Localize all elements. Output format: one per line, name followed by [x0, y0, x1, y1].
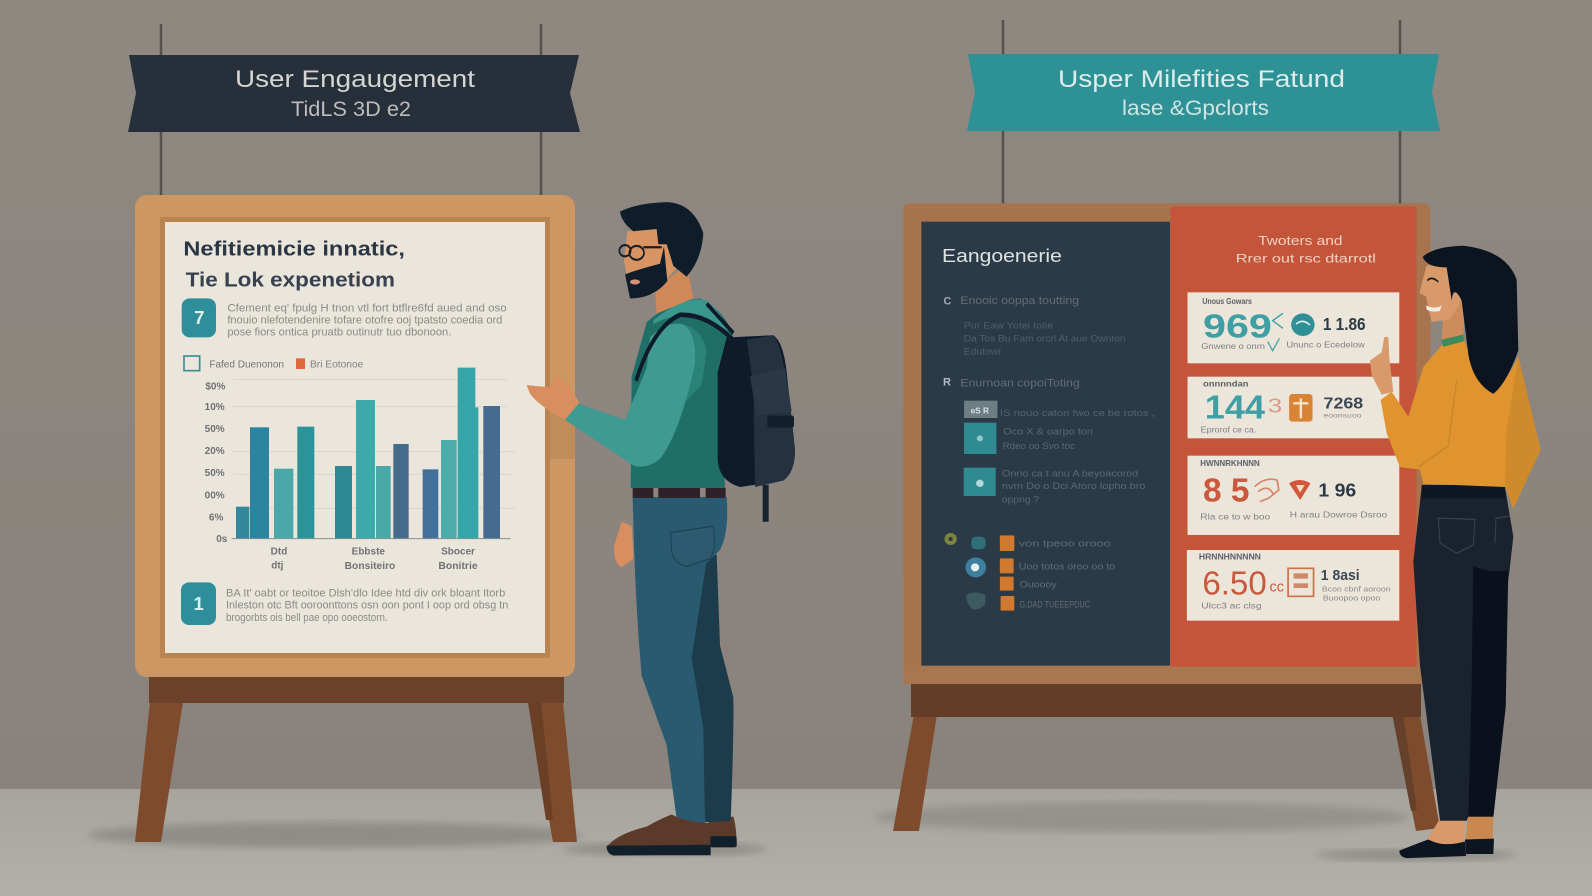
- back leg: [690, 554, 733, 822]
- heading: [183, 237, 405, 292]
- stat card 2: onnnndan: [1203, 380, 1249, 389]
- item tile teal: [964, 423, 996, 454]
- stat card 2: Eprorof ce ca.: [1201, 425, 1256, 434]
- paper sheet: [165, 222, 545, 653]
- stat card 3: Rla ce to w boo: [1200, 511, 1271, 521]
- banner title: User Engaugement: [235, 66, 475, 93]
- stat card 1: 969: [1203, 308, 1272, 346]
- stat card 4: 1 8asi: [1321, 568, 1360, 584]
- stat card 1: Gnwene o onrn: [1201, 341, 1265, 351]
- section one: [943, 295, 1126, 358]
- stat card 4: Bcon cbnf aoroon: [1322, 584, 1391, 593]
- pants: [1413, 487, 1513, 821]
- stat card 1: Ununc o Ecedelow: [1286, 340, 1366, 350]
- text block: note: [226, 588, 508, 624]
- stat card 2: eoonsuoo: [1324, 412, 1362, 419]
- bar chart: Ebbste: [352, 547, 385, 558]
- hair: [620, 202, 703, 277]
- text block: note: Inleston otc Bft ooroonttons osn oon pont I oop ord obsg tn: [226, 600, 508, 612]
- stat card 4: HRNNHNNNNN: [1199, 552, 1261, 561]
- stat card 2: 7268: [1324, 396, 1364, 412]
- bar chart: Dtd: [271, 547, 287, 558]
- stat card 3: HWNNRKHNNN: [1200, 459, 1260, 468]
- banner subtitle: TidLS 3D e2: [291, 98, 411, 121]
- text block: note: BA It' oabt or teoitoe Dlsh'dlo Idee htd div ork bloant Itorb: [226, 588, 505, 600]
- heading: Nefitiemicie innatic,: [183, 237, 405, 260]
- section two: IS nouo caton fwo ce be rotos ,: [1000, 408, 1155, 418]
- item tile teal lower: [964, 468, 996, 496]
- stat card 3: H arau Dowroe Dsroo: [1290, 510, 1388, 520]
- stat card 4: 6.50: [1202, 565, 1267, 602]
- banner: right heading: [967, 54, 1440, 131]
- stat card 2: 144: [1205, 389, 1265, 426]
- panel: left board: [135, 195, 575, 677]
- sweater: [1381, 339, 1540, 508]
- stat card 1: Unous Gowars: [1202, 297, 1252, 306]
- hand: [527, 374, 579, 420]
- pockets: [1438, 516, 1510, 553]
- lower hand: [614, 522, 633, 567]
- icon list: [944, 533, 1115, 611]
- easel: right stand: [893, 683, 1440, 831]
- section two: R: [943, 377, 951, 389]
- bar chart: Sbocer: [441, 547, 475, 558]
- stat card 4: cc: [1269, 580, 1284, 596]
- stat card 3: 8 5: [1203, 472, 1250, 510]
- bar chart: 20%: [205, 446, 225, 457]
- section two: eS R: [971, 406, 989, 415]
- panel: red column: [1170, 207, 1417, 667]
- icon: numbered tile lower: 1: [193, 593, 204, 614]
- section one: Pur Eaw Yotei Iotie: [964, 321, 1053, 332]
- text block: intro: fnouio nlefotendenire tofare otofre ooj tpatsto coedia ord: [227, 314, 502, 326]
- shoes: [1465, 839, 1494, 854]
- banner: left heading: [128, 55, 580, 132]
- section two: Enurnoan copoiToting: [960, 378, 1080, 390]
- section two: Onno ca t anu A beyoacorod: [1002, 469, 1138, 479]
- belt: [633, 488, 726, 498]
- heading: Eangoenerie: [942, 246, 1062, 267]
- text block: intro: [227, 303, 507, 338]
- backpack: [636, 304, 795, 522]
- stat card 1: [1188, 292, 1399, 363]
- section one: Da Tos Bu Fam orcri At aue Ownton: [964, 334, 1126, 345]
- hand: [1370, 337, 1393, 395]
- floor: [0, 789, 1592, 896]
- figure: woman pointing: [1370, 246, 1541, 858]
- face: [1419, 265, 1462, 322]
- stat card 4: [1187, 550, 1399, 621]
- front shoe: [607, 814, 711, 856]
- bar chart: Bonitrie: [438, 561, 478, 572]
- section one: Enooic ooppa toutting: [960, 295, 1079, 307]
- easel: left stand: [135, 675, 577, 842]
- panel: red column: Rrer out rsc dtarrotl: [1236, 252, 1376, 266]
- text block: note: brogorbts ois bell pae opo ooeostorn.: [226, 612, 388, 624]
- stat card 3: [1188, 456, 1399, 535]
- bar chart: 50%: [205, 424, 225, 435]
- figure: man with backpack: [527, 202, 795, 856]
- item tile gray: [964, 401, 997, 418]
- stat card 1: 1 1.86: [1323, 314, 1366, 334]
- icon list: Ouoooy: [1019, 579, 1057, 589]
- bar chart: Bonsiteiro: [345, 561, 395, 572]
- icon list: von tpeoo orooo: [1019, 539, 1111, 549]
- board content: [181, 237, 515, 625]
- icon list: G.DAD TUEEEPDUC: [1019, 599, 1090, 609]
- stat card 4: Buoopoo opoo: [1323, 593, 1380, 602]
- bar chart: 50%: [205, 468, 225, 479]
- glasses: [619, 245, 662, 260]
- section two: nvrn Do o Dci Atoro lopho bro: [1002, 481, 1146, 491]
- chart legend: [184, 356, 364, 371]
- bar chart: 0s: [216, 534, 228, 545]
- section one: Edutowr: [964, 347, 1002, 358]
- hanging wires: [161, 20, 1400, 204]
- board frame: [903, 203, 1430, 683]
- chart legend: Fafed Duenonon: [209, 359, 284, 370]
- face: [624, 229, 677, 294]
- stat card 3: 1 96: [1318, 481, 1356, 502]
- back shoe: [708, 817, 737, 847]
- heading: Twoters and: [1258, 233, 1342, 248]
- text block: intro: pose fiors ontica pruatb outinutr tuo dbonoon.: [227, 326, 451, 338]
- hair: [1423, 246, 1518, 394]
- pocket: [671, 526, 714, 566]
- banner subtitle: lase &Gpclorts: [1122, 97, 1269, 120]
- text block: intro: Cfement eq' fpulg H tnon vtl fort btflre6fd aued and oso: [227, 303, 507, 315]
- section one: C: [943, 296, 952, 308]
- front leg: [633, 497, 727, 824]
- section two: Oco X & oarpo ton: [1003, 426, 1093, 436]
- bar chart: dtj: [271, 561, 284, 572]
- section two: Rdeo oo Svo toc: [1003, 441, 1075, 451]
- stat card 4: Ulcc3 ac clsg: [1201, 601, 1262, 611]
- icon: numbered tile: 7: [194, 307, 205, 328]
- beard: [625, 246, 667, 298]
- panel: right board: [903, 203, 1430, 684]
- stat card 2: 3: [1268, 395, 1282, 418]
- torso: [631, 298, 733, 488]
- panel: dark column: [921, 222, 1170, 666]
- stat card 2: [1188, 377, 1399, 438]
- section two: oppng ?: [1002, 495, 1039, 505]
- sleeve: [565, 324, 695, 467]
- heading: Tie Lok expenetiom: [186, 270, 395, 292]
- banner title: Usper Milefities Fatund: [1058, 66, 1345, 93]
- bar chart: 6%: [209, 513, 223, 524]
- icon list: Uoo totos oroo oo to: [1019, 561, 1115, 571]
- bar chart: $0%: [205, 381, 225, 392]
- icon: numbered tile: [182, 298, 216, 337]
- icon: numbered tile lower: [181, 582, 216, 625]
- neck: [655, 264, 693, 314]
- bar chart: 00%: [205, 491, 225, 502]
- section two: [943, 377, 1155, 505]
- foot skin: [1423, 819, 1465, 846]
- chart legend: Bri Eotonoe: [310, 359, 364, 370]
- bar chart: [205, 368, 515, 572]
- neck: [1442, 300, 1465, 342]
- bar chart: 10%: [205, 402, 225, 413]
